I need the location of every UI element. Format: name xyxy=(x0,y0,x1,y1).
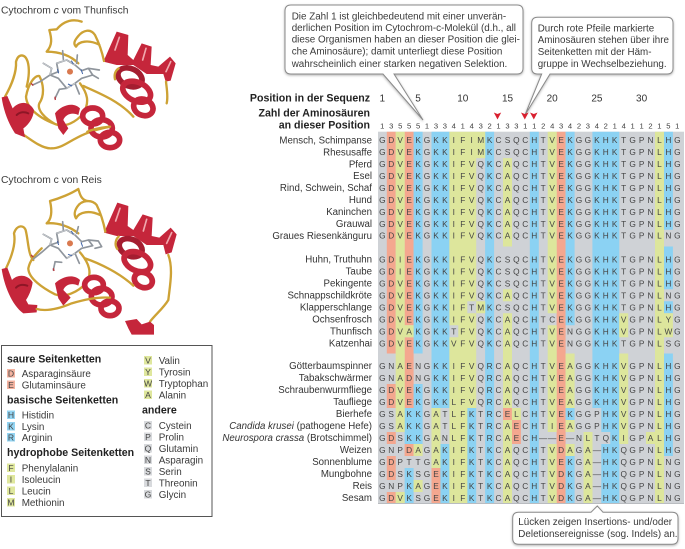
species labels: group 1: Graues Riesenkänguru xyxy=(272,231,372,242)
species labels: group 1: Mensch, Schimpanse xyxy=(279,135,372,146)
callout: Zahl 1 invariant position: Die Zahl 1 ist gleichbedeutend mit einer unverän- xyxy=(292,12,506,22)
amino acid sequences: group 1: GDVEKGKKIFIMKCSQCHTVEKGGKHKTGPNLHG xyxy=(379,147,681,157)
species labels: group 3: Neurospora crassa (Brotschimmel) xyxy=(222,433,372,444)
legend group: andere: andere xyxy=(142,404,177,416)
legend group: andere: Q xyxy=(145,443,152,453)
amino acid sequences: group 2: GDVEKGKKIFVQKCAQCHTCEKGGKHKVGPNLYG xyxy=(379,314,681,324)
amino acid sequences: group 1: GDVEKGKKIFVQKCAQCHTVEKGGKHKTGPNLHG xyxy=(379,195,681,205)
legend group: hydrophobe Seitenketten: Methionin xyxy=(22,498,65,509)
legend group: hydrophobe Seitenketten: Phenylalanin xyxy=(22,464,78,474)
legend group: andere: C xyxy=(145,420,151,430)
amino acid sequences: group 3: GNPKAGEKIFKTKCAQCHTVDKGA—HKQGPNLNG xyxy=(379,481,681,491)
legend group: hydrophobe Seitenketten: Alanin xyxy=(159,390,186,402)
heading: Zahl der Aminosäuren an dieser Position: Zahl der Aminosäuren xyxy=(259,108,370,120)
legend group: andere xyxy=(142,404,203,501)
position numbers: 1 xyxy=(380,94,386,104)
legend group: hydrophobe Seitenketten: W xyxy=(144,378,153,388)
species labels: group 1 xyxy=(272,135,372,242)
legend group: saure Seitenketten: D xyxy=(8,368,14,378)
legend group: basische Seitenketten: Arginin xyxy=(22,433,52,444)
species labels: group 2: Huhn, Truthuhn xyxy=(305,254,372,266)
callout: Indels xyxy=(513,506,678,544)
amino acid sequences: group 1: GDVEKGKKIFVQKCAQCHTVEKGGKHKTGPNLHG xyxy=(379,219,681,229)
amino acid sequences: group 3 xyxy=(379,361,681,503)
position numbers: 25 xyxy=(591,94,603,104)
callout: rote Pfeile xyxy=(525,17,673,115)
position numbers: 10 xyxy=(457,94,469,104)
legend group: andere: Cystein xyxy=(159,421,192,432)
amino acid sequences: group 1: GDVEKGKKIFVQKCAQCHTVEKGGKHKTGPNLNG xyxy=(379,231,681,241)
callout: Zahl 1 invariant position: che Aminosäure); damit unterliegt diese Position xyxy=(292,46,502,57)
legend group: hydrophobe Seitenketten: Tryptophan xyxy=(159,379,208,390)
amino acid sequences: group 3: GNPDAGAKIFKTKCAQCHTVDAGA—HKQGPNLHG xyxy=(379,445,681,455)
legend group: hydrophobe Seitenketten xyxy=(7,355,208,509)
callout: Zahl 1 invariant position: diese Organismen haben an dieser Position die glei- xyxy=(292,35,520,46)
amino acid sequences: group 3: GNADNGKKIFVQRCAQCHTVEAGGKHKVGPNLHG xyxy=(379,373,681,383)
legend group: basische Seitenketten: H xyxy=(8,410,14,420)
species labels: group 2: Pekingente xyxy=(324,278,372,290)
legend group: saure Seitenketten: E xyxy=(8,380,14,390)
legend group: andere: P xyxy=(145,432,151,442)
amino acid sequences: group 2: GDVEKGKKIFVQKCAQCHTVEKGGKHKTGPNLNG xyxy=(379,290,681,300)
callout: rote Pfeile: Durch rote Pfeile markierte xyxy=(538,24,655,34)
callout: Zahl 1 invariant position: wahrscheinlich einer starken negativen Selektion. xyxy=(291,59,507,70)
callout: Indels: Lücken zeigen Insertions- und/oder xyxy=(518,517,673,528)
species labels: group 1: Hund xyxy=(349,195,372,206)
legend group: andere: Threonin xyxy=(159,478,198,490)
species labels: group 3: Schraubenwurmfliege xyxy=(278,385,372,396)
amino acid sequences: group 2: GDVEKGKKIFTMKCSQCHTVEKGGKHKTGPNLHG xyxy=(379,302,681,312)
amino acid sequences: group 2: GDVAKGKKTFVQKCAQCHTVENGGKHKVGPNLWG xyxy=(379,326,681,336)
legend group: hydrophobe Seitenketten: L xyxy=(9,486,14,496)
species labels: group 3: Candida krusei (pathogene Hefe) xyxy=(229,421,372,432)
legend group: hydrophobe Seitenketten: I xyxy=(10,474,12,484)
position numbers: 5 xyxy=(415,94,421,104)
callout: rote Pfeile: Seitenketten mit der Häm- xyxy=(538,47,652,58)
legend group: andere: Prolin xyxy=(159,432,184,444)
amino acid sequences: group 3: GDSKKGANLFKTRCAECH——E—NLTQKIGPALHG xyxy=(379,433,681,443)
species labels: group 3: Sesam xyxy=(342,493,372,504)
title: Cytochrom c von Reis: Cytochrom c von Reis xyxy=(1,175,102,186)
legend group: basische Seitenketten: Histidin xyxy=(22,410,54,422)
callout: Zahl 1 invariant position: derlichen Position im Cytochrom-c-Molekül (d.h., all xyxy=(292,23,516,34)
amino acid counts per position: 1355513341432133112434234214112151 xyxy=(380,121,679,130)
amino acid sequences: group 2: GDIEKGKKIFVQKCSQCHTVEKGGKHKTGPNLHG xyxy=(379,254,681,264)
legend group: basische Seitenketten: R xyxy=(8,432,14,442)
protein model: tuna cytochrome c xyxy=(2,20,176,148)
species labels: group 2: Klapperschlange xyxy=(300,302,372,314)
protein model: rice cytochrome c xyxy=(2,189,177,335)
amino acid sequences: group 1: GDVEKGKKIFIMKCSQCHTVEKGGKHKTGPNLHG xyxy=(379,135,681,145)
callout: rote Pfeile: Aminosäuren stehen über ihre xyxy=(538,35,670,46)
amino acid sequences: group 1: GDVEKGKKIFVQKCAQCHTVEKGGKHKTGPNLHG xyxy=(379,183,681,193)
title: Cytochrom c vom Thunfisch: Cytochrom c vom Thunfisch xyxy=(1,6,129,16)
legend group: saure Seitenketten: saure Seitenketten xyxy=(7,354,101,366)
legend group: andere: T xyxy=(145,478,151,488)
red arrow markers xyxy=(494,112,538,120)
amino acid sequences: group 2: GDIEKGKKIFVQKCSQCHTVEKGGKHKTGPNLHG xyxy=(379,266,681,276)
position numbers: 15 xyxy=(502,94,513,104)
amino acid sequences: group 3: GSAKKGATLFKTRCELCHTVEKGGPHKVGPNLHG xyxy=(379,409,681,419)
species labels: group 2: Thunfisch xyxy=(330,326,372,338)
legend group: andere: G xyxy=(145,489,152,499)
amino acid sequences: group 1: GDVEKGKKIFVQKCAQCHTVEKGGKHKTGPNLHG xyxy=(379,171,681,181)
amino acid sequences: group 3: GDVEKGKKIFVQRCAQCHTVEAGGKHKVGPNLHG xyxy=(379,385,681,395)
legend group: hydrophobe Seitenketten: Tyrosin xyxy=(159,368,191,378)
species labels: group 2: Taube xyxy=(346,266,372,278)
legend group: hydrophobe Seitenketten: Leucin xyxy=(22,486,51,498)
species labels: group 3: Tabakschwärmer xyxy=(299,373,373,384)
species labels: group 3: Taufliege xyxy=(333,397,372,408)
callout: Zahl 1 invariant position xyxy=(285,5,523,120)
species labels: group 1: Pferd xyxy=(349,159,372,170)
amino acid sequences: group 3: GDVEKGKKLFVQRCAQCHTVEAGGKHKVGPNLHG xyxy=(379,397,681,407)
amino acid sequences: group 3: GDSKSGEKIFKTKCAQCHTVDKGA—HKQGPNLNG xyxy=(379,469,681,479)
position numbers: 20 xyxy=(547,94,558,104)
legend group: basische Seitenketten: K xyxy=(8,421,14,431)
legend group: hydrophobe Seitenketten: hydrophobe Seitenketten xyxy=(7,447,134,459)
position numbers: 30 xyxy=(636,94,648,104)
legend group: andere: S xyxy=(145,466,151,476)
legend group: andere: Glutamin xyxy=(159,444,198,455)
species labels: group 1: Esel xyxy=(353,171,372,182)
legend group: hydrophobe Seitenketten: Isoleucin xyxy=(22,475,61,486)
amino acid sequences: group 3: GDVKSGEKIFKTKCAQCHTVDKGA—HKQGPNLNG xyxy=(379,493,681,503)
species labels: group 3: Götterbaumspinner xyxy=(289,361,373,372)
legend group: andere: Serin xyxy=(159,467,182,478)
amino acid sequences: group 3: GSAKKGATLFKTRCAECHTIEAGGPHKVGPNLHG xyxy=(379,421,681,431)
species labels: group 1: Rind, Schwein, Schaf xyxy=(280,183,372,194)
callout: Indels: Deletionsereignisse (sog. Indels) an. xyxy=(518,529,678,540)
species labels: group 1: Kaninchen xyxy=(326,207,372,218)
heading: Position in der Sequenz: Position in der Sequenz xyxy=(250,92,370,104)
legend group: basische Seitenketten: Lysin xyxy=(22,422,44,433)
species labels: group 2: Ochsenfrosch xyxy=(312,314,372,326)
alignment grid xyxy=(378,132,684,504)
species labels: group 3: Mungbohne xyxy=(321,469,372,480)
species labels: group 3: Weizen xyxy=(340,445,372,456)
amino acid sequences: group 1 xyxy=(379,135,681,241)
species labels: group 1: Grauwal xyxy=(336,219,372,230)
position numbers xyxy=(380,94,648,104)
amino acid sequences: group 3: GDPTTGAKIFKTKCAQCHTVEKGA—HKQGPNLNG xyxy=(379,457,681,467)
legend group: hydrophobe Seitenketten: V xyxy=(145,355,151,365)
amino acid sequences: group 1: GDVEKGKKIFVQKCAQCHTVEKGGKHKTGPNLHG xyxy=(379,159,681,169)
species labels: group 3 xyxy=(222,361,373,504)
legend: amino acid side chains xyxy=(2,346,212,516)
heading: Zahl der Aminosäuren an dieser Position: an dieser Position xyxy=(279,120,370,132)
legend group: hydrophobe Seitenketten: A xyxy=(145,390,151,400)
species labels: group 2: Katzenhai xyxy=(329,338,372,350)
legend group: saure Seitenketten xyxy=(7,354,101,392)
species labels: group 2 xyxy=(287,254,372,350)
legend group: basische Seitenketten xyxy=(7,394,118,444)
legend group: andere: Glycin xyxy=(159,490,186,501)
amino acid sequences: group 2: GDVEKGKKVFVQKCAQCHTVENGGKHKTGPNLSG xyxy=(379,338,681,348)
legend group: basische Seitenketten: basische Seitenketten xyxy=(7,394,118,406)
legend group: andere: Asparagin xyxy=(159,456,203,466)
legend group: saure Seitenketten: Asparaginsäure xyxy=(22,369,91,380)
amino acid sequences: group 2: GDVEKGKKIFVQKCSQCHTVEKGGKHKTGPNLHG xyxy=(379,278,681,288)
species labels: group 2: Schnappschildkröte xyxy=(287,290,372,302)
legend group: hydrophobe Seitenketten: Valin xyxy=(159,356,180,367)
species labels: group 3: Reis xyxy=(353,481,372,492)
legend group: hydrophobe Seitenketten: F xyxy=(8,463,14,473)
callout: rote Pfeile: gruppe in Wechselbeziehung. xyxy=(538,59,667,70)
legend group: hydrophobe Seitenketten: Y xyxy=(145,367,151,377)
legend group: hydrophobe Seitenketten: M xyxy=(7,497,15,507)
species labels: group 1: Rhesusaffe xyxy=(323,147,372,158)
amino acid sequences: group 1: GDVEKGKKIFVQKCAQCHTVEKGGKHKTGPNLHG xyxy=(379,207,681,217)
amino acid sequences: group 2 xyxy=(379,254,681,348)
species labels: group 3: Bierhefe xyxy=(336,409,372,420)
species labels: group 3: Sonnenblume xyxy=(312,457,372,468)
amino acid sequences: group 3: GNAENGKKIFVQRCAQCHTVEAGGKHKVGPNLHG xyxy=(379,361,681,371)
legend group: andere: N xyxy=(145,455,151,465)
heading: Zahl der Aminosäuren an dieser Position xyxy=(259,108,370,132)
legend group: saure Seitenketten: Glutaminsäure xyxy=(22,380,86,392)
